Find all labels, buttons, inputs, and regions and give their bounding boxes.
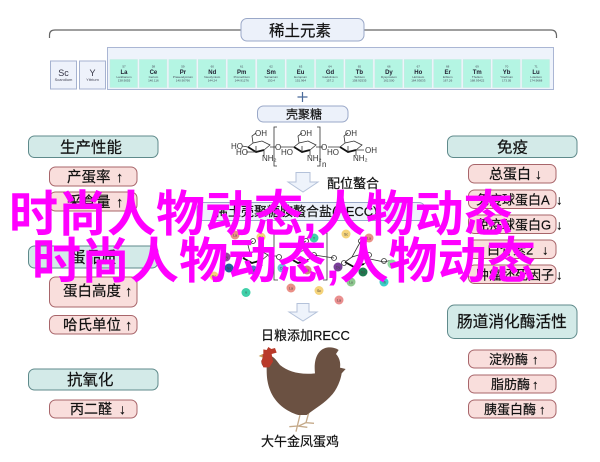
item: IgA [468, 190, 562, 208]
lanthanide cells: 167.26 [443, 78, 453, 82]
RECC label [197, 202, 425, 220]
rare earth ions: Nd [227, 266, 231, 270]
item: Haugh unit: ↑ [125, 318, 132, 334]
heading: 蛋品质 [70, 248, 117, 266]
lanthanide cells: Lutetium [530, 75, 542, 79]
label: coordination chelation: 配位螯合 [327, 176, 379, 191]
item: malondialdehyde: 丙二醛 [70, 401, 112, 417]
lanthanide cells: 162.500 [383, 78, 395, 82]
lanthanide cells: 174.9668 [530, 78, 543, 82]
lanthanide cells: Gadolinium [322, 75, 338, 79]
rare earth ions [210, 230, 396, 304]
rare earth ions: Dy [224, 256, 228, 260]
lanthanide cells: Sm [267, 70, 276, 76]
chitosan label [258, 106, 348, 122]
rare earth ions: Nd [361, 270, 365, 274]
element Sc: Scandium [55, 77, 73, 82]
lanthanide cells: 62 [270, 64, 273, 68]
lanthanide cells: 157.2 [326, 78, 334, 82]
rare earth ions: Ce [280, 266, 284, 270]
item: laying rate: 产蛋率 [67, 170, 110, 186]
rare earth ions: Gd [251, 268, 255, 272]
heading: 免疫 [497, 138, 528, 156]
rare earth ions: Sc [344, 232, 348, 236]
item: Haugh unit [50, 316, 137, 334]
lanthanide cells: Erbium [443, 75, 453, 79]
rare earth ions: Dy [336, 266, 340, 270]
rare earth ions: Sc [212, 274, 216, 278]
heading: 肠道消化酶活性 [457, 313, 567, 331]
item: trypsin: 胰蛋白酶 [484, 402, 536, 417]
chitosan structure: HO [281, 148, 293, 157]
lanthanide cells: 61 [240, 64, 244, 68]
item: IgA: 免疫球蛋白A [476, 192, 550, 208]
item: interleukin 2 [468, 240, 556, 258]
item: TNF: 肿瘤坏死因子 [476, 268, 554, 282]
RECC structure [210, 230, 396, 304]
chitosan structure: OH [345, 129, 357, 138]
item: trypsin: ↑ [539, 402, 546, 417]
chitosan structure: n [322, 160, 326, 169]
item: malondialdehyde: ↓ [119, 401, 126, 417]
item: laying rate: ↑ [116, 170, 123, 186]
item: amylase: ↑ [532, 352, 538, 367]
heading: 生产性能 [60, 138, 122, 156]
lanthanide cells: Ce [150, 70, 158, 76]
arrow: dietary addition [289, 304, 317, 321]
lanthanide cells: 168.93422 [470, 78, 485, 82]
rare earth ions: La [289, 286, 293, 290]
item: albumen height: 蛋白高度 [63, 284, 121, 300]
lanthanide cells: Tm [473, 70, 482, 76]
element Y [80, 61, 106, 89]
item: TNF: ↓ [556, 268, 562, 282]
panel: immunity [448, 136, 577, 284]
lanthanide cells: Eu [297, 70, 305, 76]
label: dietary RECC: 日粮添加RECC [261, 328, 350, 343]
lanthanide cells: 144.91276 [235, 78, 249, 82]
lanthanide cells: 138.9055 [118, 78, 131, 82]
item: feed intake: ↑ [116, 195, 123, 211]
lanthanide cells: Promethium [234, 75, 250, 79]
rare earth ions: Tb [382, 280, 386, 284]
item: lipase: ↑ [532, 377, 538, 392]
lanthanide cells: 63 [299, 64, 303, 68]
item: laying rate [50, 167, 137, 186]
rare earth ions: Sc [259, 236, 263, 240]
label: hen breed: 大午金凤蛋鸡 [261, 434, 339, 449]
item: total protein: ↓ [535, 166, 542, 182]
item: IgG: ↓ [556, 218, 562, 232]
item: amylase [468, 350, 556, 368]
section title: rare earth elements [50, 18, 556, 41]
lanthanide cells: Er [445, 70, 452, 76]
chitosan structure: OH [300, 129, 312, 138]
item: IgG: 免疫球蛋白G [476, 218, 551, 232]
lanthanide cells: Ho [414, 70, 423, 76]
periodic table panel [50, 48, 554, 90]
lanthanide cells: 67 [417, 64, 420, 68]
lanthanide cells: 150.4 [267, 78, 275, 82]
lanthanide cells: Holmium [412, 75, 425, 79]
panel: egg quality [28, 246, 158, 334]
item: amylase: 淀粉酶 [489, 352, 528, 367]
chitosan label: 壳聚糖 [286, 106, 322, 122]
chitosan structure: HO [231, 142, 243, 151]
lanthanide cells: Gd [326, 70, 334, 76]
lanthanide cells: La [120, 70, 128, 76]
item: interleukin 2: ↓ [542, 242, 548, 258]
lanthanide cells: Cerium [149, 75, 159, 79]
heading: 抗氧化 [67, 371, 114, 389]
lanthanide cells: 71 [534, 64, 538, 68]
lanthanide cells: 65 [358, 64, 361, 68]
rare earth ions: Sc [317, 289, 321, 293]
element Y: Yttrium [86, 77, 100, 82]
lanthanide cells: 69 [476, 64, 479, 68]
chitosan structure: HO [236, 148, 248, 157]
item: lipase: 脂肪酶 [491, 377, 530, 392]
chitosan structure: NH₂ [353, 154, 368, 163]
lanthanide cells [110, 60, 550, 88]
lanthanide cells: 64 [328, 64, 332, 68]
rare earth ions: Ce [305, 268, 309, 272]
chitosan structure: O [321, 143, 327, 152]
lanthanide cells: 60 [211, 64, 214, 68]
arrow: coordination chelation [288, 172, 318, 192]
lanthanide cells: Yb [503, 70, 511, 76]
plus sign [298, 92, 308, 102]
lanthanide cells: Pm [237, 70, 246, 76]
panel: intestinal digestive enzymes [448, 305, 577, 418]
lanthanide cells: 164.93033 [411, 78, 426, 82]
item: total protein [468, 164, 556, 183]
heading [448, 136, 577, 158]
rare earth ions: La [367, 236, 371, 240]
rare earth ions: La [233, 234, 237, 238]
lanthanide cells: Thulium [472, 75, 483, 79]
item: albumen height [50, 277, 137, 307]
item: albumen height: ↑ [125, 284, 132, 300]
lanthanide cells: 144.24 [208, 78, 217, 82]
item: IgG [468, 215, 562, 234]
lanthanide cells: Ytterbium [500, 75, 514, 79]
item: feed intake: 采食量 [67, 195, 110, 211]
item: interleukin 2: 白介素2 [487, 242, 533, 258]
chitosan structure: O [275, 143, 281, 152]
chitosan structure: HO [327, 148, 339, 157]
rare earth ions: La [337, 298, 341, 302]
lanthanide cells: Pr [180, 70, 187, 76]
lanthanide cells: Europium [294, 75, 308, 79]
lanthanide cells: Dysprosium [381, 75, 397, 79]
lanthanide cells: Terbium [354, 75, 365, 79]
section title: rare earth elements: 稀土元素 [269, 22, 331, 40]
lanthanide cells: 57 [122, 64, 126, 68]
chitosan structure: OH [255, 129, 267, 138]
lanthanide cells: Lanthanum [116, 75, 132, 79]
lanthanide cells: 68 [446, 64, 450, 68]
lanthanide cells: 140.90766 [176, 78, 190, 82]
icon: laying hen [259, 347, 346, 432]
lanthanide cells: Tb [356, 70, 363, 76]
lanthanide cells: 151.964 [295, 78, 306, 82]
lanthanide cells: Dy [385, 70, 393, 76]
lanthanide cells: Samarium [264, 75, 279, 79]
element Y: Y [89, 68, 96, 78]
panel: antioxidant [28, 369, 158, 418]
element Sc [50, 61, 76, 89]
lanthanide cells: Praseodymium [173, 75, 193, 79]
lanthanide cells: 140.116 [148, 78, 159, 82]
lanthanide cells: Lu [532, 70, 540, 76]
watermark: second line: 时尚人物动态,人物动态 [32, 235, 536, 289]
item: malondialdehyde [50, 400, 137, 418]
item: total protein: 总蛋白 [489, 166, 531, 182]
lanthanide cells: Neodymium [204, 75, 221, 79]
watermark: first line: 时尚人物动态,人物动态 [9, 188, 513, 242]
element Sc: Sc [58, 68, 69, 78]
item: feed intake [50, 192, 137, 211]
chitosan structure [231, 127, 377, 169]
rare earth ions: Lu [349, 280, 353, 284]
rare earth ions: Y [245, 291, 248, 295]
lanthanide cells: 158.92535 [352, 78, 367, 82]
RECC label: 稀土壳聚糖胺螯合盐(RECC) [215, 204, 378, 219]
chitosan structure: NH₂ [307, 154, 322, 163]
lanthanide cells: 173.05 [502, 78, 512, 82]
chitosan structure: OH [365, 146, 377, 155]
item: IgA: ↓ [556, 192, 562, 208]
item: Haugh unit: 哈氏单位 [63, 318, 121, 334]
lanthanide cells: 58 [152, 64, 155, 68]
item: trypsin [468, 400, 556, 418]
item: TNF [468, 265, 562, 284]
lanthanide cells: Nd [208, 70, 217, 76]
rare earth ions: Ce [390, 262, 394, 266]
lanthanide cells: 66 [387, 64, 391, 68]
item: lipase [468, 375, 556, 393]
panel: production performance [28, 136, 158, 211]
lanthanide cells: 70 [505, 64, 509, 68]
lanthanide cells: 59 [181, 64, 185, 68]
rare earth ions: Y [313, 236, 316, 240]
chitosan structure: NH₂ [262, 154, 277, 163]
